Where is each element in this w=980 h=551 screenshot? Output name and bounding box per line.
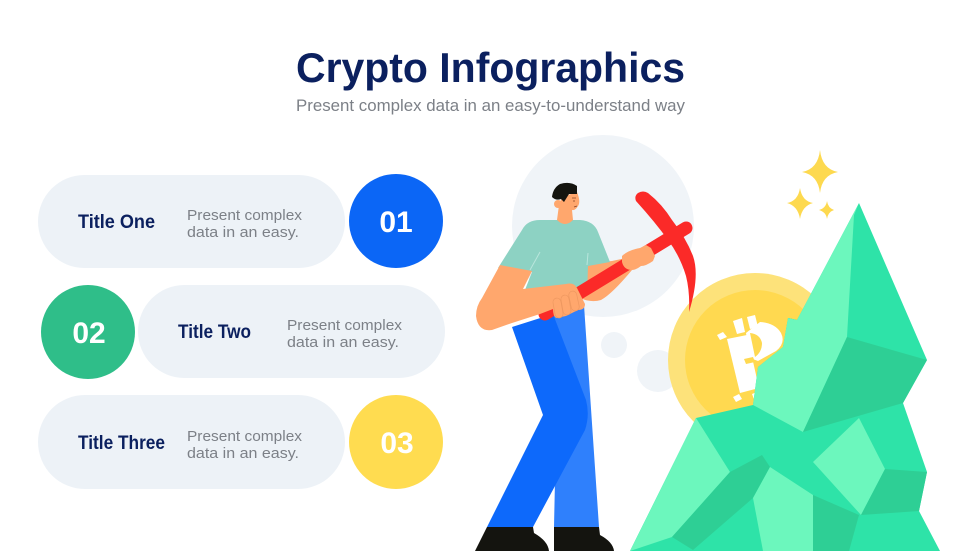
number badge 01 xyxy=(349,174,443,268)
shirt fold xyxy=(530,252,588,270)
person with pickaxe xyxy=(475,183,696,551)
heading: title two: Title Two xyxy=(178,322,251,343)
ear xyxy=(554,200,562,208)
pill background three xyxy=(38,395,345,489)
lower dark facet xyxy=(813,495,859,551)
heading: title three: Title Three xyxy=(78,433,165,454)
heading: title one: Title One xyxy=(78,212,155,233)
trousers front leg xyxy=(487,314,588,527)
neck and face xyxy=(557,192,579,224)
title: Crypto Infographics xyxy=(296,44,685,91)
small shadow notch xyxy=(788,318,797,326)
subtitle: Present complex data in an easy-to-understand way xyxy=(296,96,685,115)
upper light facet xyxy=(753,203,859,432)
icon: bitcoin coin xyxy=(668,273,842,447)
pill background one xyxy=(38,175,345,268)
upper dark facet xyxy=(803,337,927,432)
number badge 01: 01 xyxy=(379,206,413,239)
hair xyxy=(552,183,577,202)
shoes xyxy=(475,527,614,551)
number badge 02 xyxy=(41,285,135,379)
right dark facet xyxy=(861,469,927,515)
back arm xyxy=(580,258,632,301)
number badge 02: 02 xyxy=(72,317,106,350)
description one: Present complex xyxy=(187,207,303,224)
back hand xyxy=(622,245,655,270)
description three: data in an easy. xyxy=(187,445,299,462)
background circles xyxy=(512,135,694,392)
description one: data in an easy. xyxy=(187,224,299,241)
pickaxe xyxy=(545,192,696,314)
dark band facet xyxy=(672,455,770,550)
right light facet xyxy=(813,418,885,515)
icon: sparkles xyxy=(787,150,838,219)
pill background two xyxy=(138,285,445,378)
mountain of crystal xyxy=(630,203,940,551)
shirt xyxy=(498,220,610,295)
panel: item three xyxy=(38,395,443,489)
panel: item one xyxy=(38,174,443,268)
lower light facet xyxy=(753,467,813,551)
left light facet xyxy=(630,418,730,551)
mountain base xyxy=(630,203,940,551)
pickaxe handle xyxy=(545,228,686,314)
front arm xyxy=(476,265,585,330)
description three: Present complex xyxy=(187,428,303,445)
pickaxe blade xyxy=(635,192,696,312)
front hand fingers xyxy=(552,290,580,319)
description two: data in an easy. xyxy=(287,334,399,351)
trousers back leg xyxy=(553,305,599,527)
panel: item two xyxy=(41,285,445,379)
description two: Present complex xyxy=(287,317,403,334)
bitcoin symbol xyxy=(717,315,783,402)
number badge 03: 03 xyxy=(380,427,414,460)
number badge 03 xyxy=(349,395,443,489)
eye and mouth xyxy=(572,198,577,207)
